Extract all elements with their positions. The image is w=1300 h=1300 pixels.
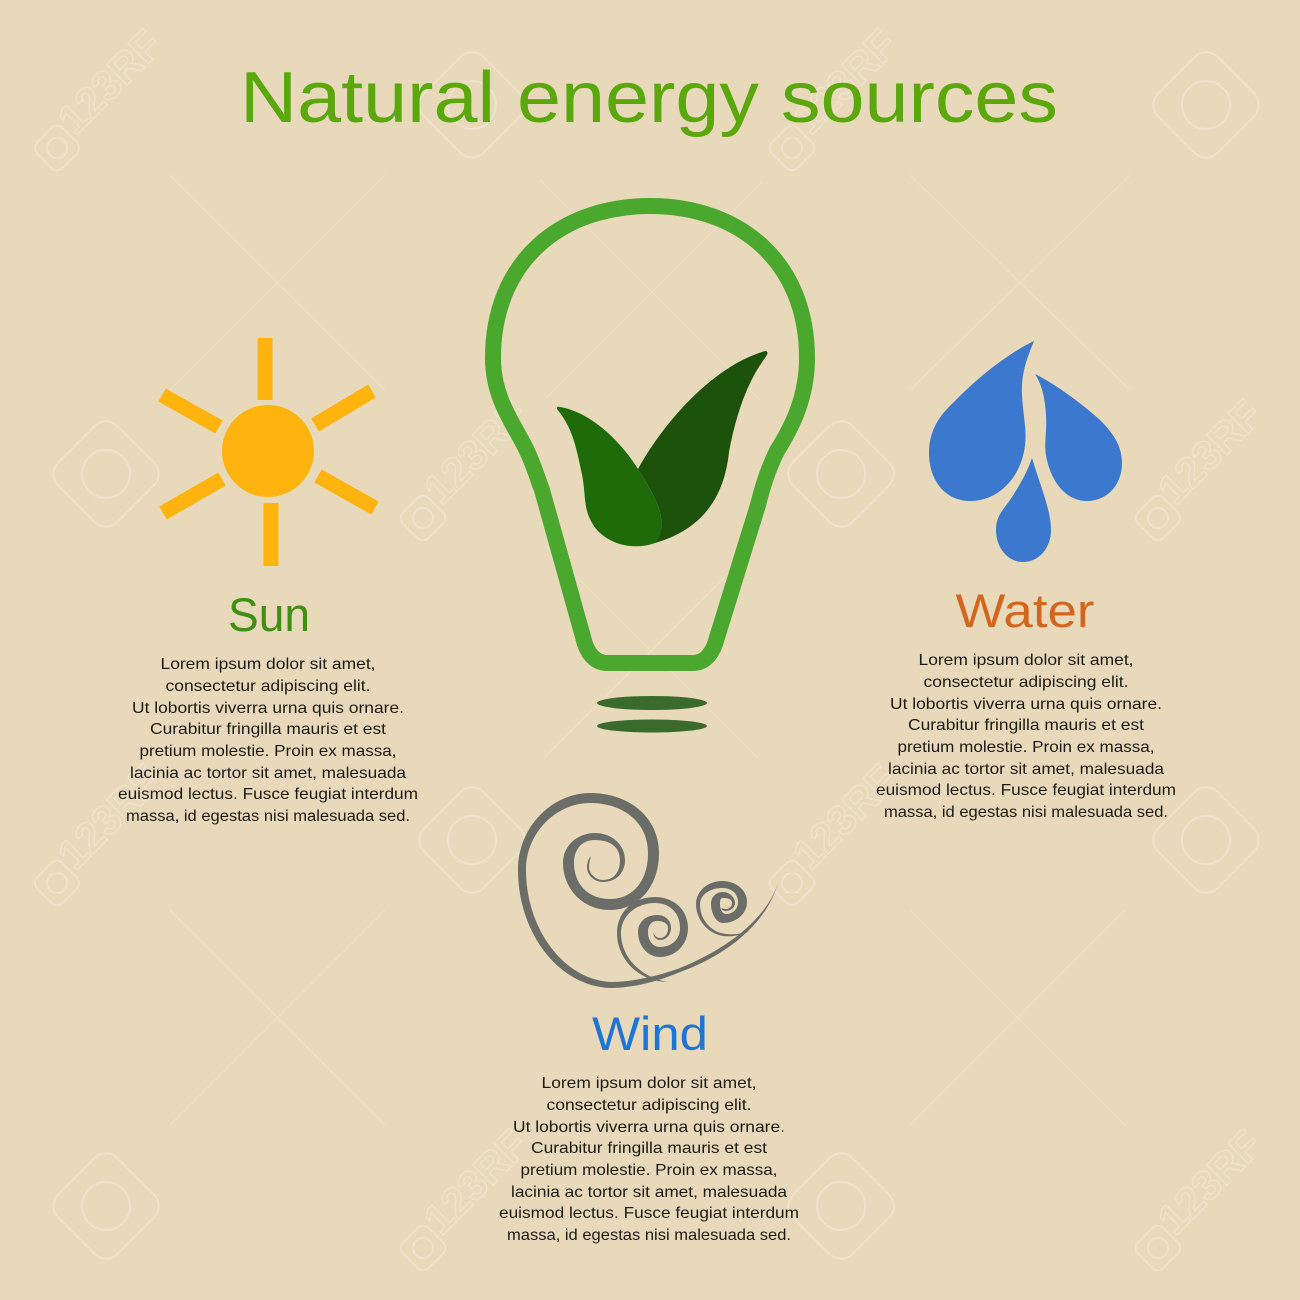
icon: water drops (929, 341, 1122, 562)
large spiral (518, 793, 778, 988)
text block: Sun: pretium molestie. Proin ex massa, (140, 743, 396, 760)
watermarks: 123RF (49, 21, 171, 143)
text block: Water: Lorem ipsum dolor sit amet, (918, 652, 1134, 669)
text block: Water: pretium molestie. Proin ex massa, (898, 739, 1154, 756)
bulb base top bar (597, 696, 707, 710)
title: Natural energy sources (240, 58, 1058, 138)
text block: Water: Curabitur fringilla mauris et est (908, 717, 1145, 734)
text block: Water: massa, id egestas nisi malesuada sed. (884, 804, 1168, 821)
right spiral (696, 881, 750, 936)
bulb base bottom bar (597, 720, 707, 732)
text block: Sun: euismod lectus. Fusce feugiat interdum (118, 786, 418, 803)
icon: sun (162, 338, 375, 566)
text block: Wind: Lorem ipsum dolor sit amet, (542, 1075, 756, 1092)
watermarks: 123RF (784, 21, 906, 143)
text block: Sun: consectetur adipiscing elit. (166, 678, 370, 695)
text block: Wind: Ut lobortis viverra urna quis ornare. (513, 1119, 785, 1136)
text block: Water: consectetur adipiscing elit. (924, 674, 1128, 691)
text block: Water: euismod lectus. Fusce feugiat interdum (876, 782, 1176, 799)
text block: Wind (499, 1075, 799, 1244)
text block: Sun: Curabitur fringilla mauris et est (150, 721, 387, 738)
text block: Sun: lacinia ac tortor sit amet, malesuada (130, 765, 406, 782)
icon: light bulb with leaves (493, 206, 807, 732)
heading: Water: Water (956, 584, 1094, 637)
text block: Sun: Lorem ipsum dolor sit amet, (160, 656, 376, 673)
text block: Wind: massa, id egestas nisi malesuada sed. (507, 1227, 791, 1244)
bulb outline (493, 206, 807, 663)
left leaf (557, 407, 661, 546)
text block: Water: Ut lobortis viverra urna quis ornare. (890, 696, 1162, 713)
text block: Water (876, 652, 1176, 821)
middle spiral (617, 897, 688, 982)
text block: Sun (118, 656, 418, 825)
text block: Wind: lacinia ac tortor sit amet, malesuada (511, 1184, 787, 1201)
text block: Water: lacinia ac tortor sit amet, malesuada (888, 761, 1164, 778)
right leaf (638, 351, 768, 543)
text block: Sun: massa, id egestas nisi malesuada sed. (126, 808, 410, 825)
watermarks: 123RF (784, 756, 906, 878)
watermarks: 123RF (1149, 1121, 1271, 1243)
text block: Sun: Ut lobortis viverra urna quis ornare. (132, 700, 404, 717)
heading: Sun: Sun (228, 588, 310, 641)
text block: Wind: euismod lectus. Fusce feugiat interdum (499, 1205, 799, 1222)
watermarks: 123RF (415, 391, 537, 513)
text block: Wind: consectetur adipiscing elit. (546, 1097, 752, 1114)
watermarks: 123RF (415, 1121, 537, 1243)
text block: Wind: Curabitur fringilla mauris et est (531, 1140, 768, 1157)
watermarks: 123RF (49, 756, 171, 878)
watermarks: 123RF (1149, 391, 1271, 513)
heading: Wind: Wind (592, 1007, 708, 1060)
text block: Wind: pretium molestie. Proin ex massa, (520, 1162, 778, 1179)
icon: wind spirals (518, 793, 778, 988)
